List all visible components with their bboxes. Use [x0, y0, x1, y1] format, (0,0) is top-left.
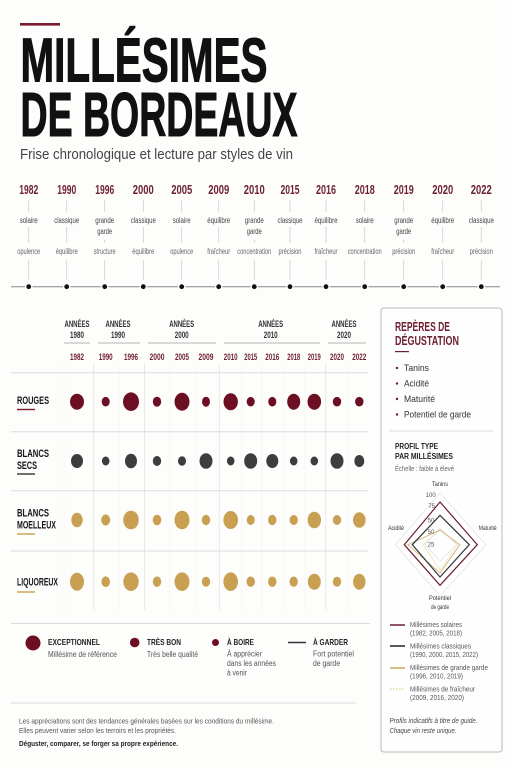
matrix year headers: 2022 [352, 352, 366, 362]
radar legend: Millésimes de fraîcheur [410, 684, 475, 694]
timeline year 2015: précision [278, 247, 302, 256]
legend [11, 624, 370, 678]
matrix year headers: 2018 [287, 352, 300, 362]
legend: à boire: À apprécier [227, 650, 262, 658]
timeline year 2010: garde [247, 227, 262, 236]
legend: très bon: Très belle qualité [147, 650, 198, 659]
timeline year 1990: 1990 [57, 183, 76, 197]
timeline year 1990: équilibre [56, 247, 78, 256]
row: rouges: ROUGES [17, 395, 49, 407]
radar legend: Millésimes solaires [410, 620, 462, 629]
timeline year 2019: garde [396, 227, 412, 236]
radar chart: 50 [428, 518, 435, 524]
timeline year 2016: équilibre [314, 216, 338, 225]
tasting criteria list [396, 363, 471, 420]
timeline year 2020: équilibre [431, 216, 455, 225]
radar legend: Millésimes de grande garde [410, 663, 488, 672]
row: blancs moelleux: MOELLEUX [17, 520, 56, 532]
timeline year 2010: concentration [237, 247, 271, 256]
tasting criteria list: Acidité [404, 378, 429, 390]
timeline year 1982 [17, 183, 41, 291]
timeline year 1990: classique [54, 216, 80, 225]
timeline year 2019: précision [392, 247, 415, 256]
timeline year 2019: grande [394, 216, 414, 225]
row: blancs secs: BLANCS [17, 448, 49, 460]
legend: à garder [288, 637, 354, 668]
row: liquoreux [17, 572, 365, 593]
decade headers: 2020 [337, 330, 351, 340]
matrix year headers: 2009 [198, 352, 214, 362]
matrix year headers: 1982 [70, 352, 84, 362]
tasting criteria list: Tanins [404, 363, 429, 374]
subtitle: Frise chronologique et lecture par styles de vin [20, 146, 293, 163]
panel heading [395, 319, 459, 352]
matrix year headers: 2016 [265, 352, 279, 362]
matrix year headers: 2020 [330, 352, 344, 362]
tasting criteria list: Potentiel de garde [404, 410, 471, 420]
title block: MILLÉSIMES [20, 26, 268, 96]
timeline year 2009: 2009 [208, 183, 229, 197]
radar heading: PROFIL TYPE [395, 442, 439, 451]
row: blancs moelleux [17, 508, 366, 535]
panel note: Profils indicatifs à titre de guide. [390, 716, 478, 725]
timeline year 1996: structure [94, 247, 116, 256]
footer note: Les appréciations sont des tendances générales basées sur les conditions du millésime. [19, 716, 274, 726]
legend: à garder: de garde [313, 659, 340, 668]
timeline [11, 183, 500, 291]
matrix year headers [70, 352, 366, 362]
decade headers: 2000 [175, 330, 189, 340]
timeline year 2018: solaire [356, 216, 374, 225]
timeline year 2000: équilibre [132, 247, 155, 256]
timeline year 1996: garde [97, 227, 113, 236]
legend: à garder: À GARDER [313, 637, 348, 647]
timeline year 1982: solaire [20, 216, 38, 225]
decade headers: ANNÉES [169, 319, 194, 329]
radar chart: 75 [428, 504, 436, 510]
radar chart: 50 [428, 530, 435, 536]
timeline year 1996: grande [95, 216, 115, 225]
decade headers: 1980 [70, 330, 84, 340]
panel heading: REPÈRES DE [395, 319, 450, 334]
row: rouges [17, 392, 363, 411]
timeline year 2005: solaire [173, 216, 191, 225]
timeline year 2015 [278, 183, 303, 291]
radar legend: (2009, 2016, 2020) [410, 693, 464, 702]
title block [20, 23, 298, 150]
radar chart: Potentiel [429, 596, 451, 602]
radar chart: Maturité [479, 526, 497, 532]
radar chart: Acidité [388, 526, 405, 532]
decade headers: ANNÉES [106, 319, 130, 329]
timeline year 2010: grande [245, 216, 264, 225]
radar legend: Millésimes classiques [410, 642, 471, 650]
decade headers: ANNÉES [258, 319, 283, 329]
timeline year 2016: fraîcheur [314, 247, 338, 256]
row: blancs secs [17, 448, 364, 475]
timeline year 2009: fraîcheur [207, 247, 230, 256]
radar heading [395, 442, 454, 473]
timeline year 2018 [348, 183, 382, 291]
radar chart: de garde [431, 605, 450, 611]
radar legend: (1982, 2005, 2018) [410, 628, 462, 638]
timeline year 2000: classique [131, 216, 156, 225]
legend: exceptionnel: EXCEPTIONNEL [48, 637, 100, 647]
radar chart: 100 [426, 493, 436, 499]
timeline year 2000 [131, 183, 156, 291]
timeline year 2005 [170, 183, 194, 291]
panel note [390, 716, 478, 735]
timeline year 2010: 2010 [244, 183, 265, 197]
timeline year 2020: 2020 [432, 183, 453, 197]
legend: très bon [130, 637, 198, 659]
matrix year headers: 2000 [150, 352, 164, 362]
matrix year headers: 2015 [244, 352, 257, 362]
row: blancs secs: SECS [17, 460, 37, 472]
legend: à garder: Fort potentiel [313, 650, 354, 658]
decade headers: ANNÉES [64, 319, 90, 329]
row: blancs moelleux: BLANCS [17, 508, 49, 520]
decade headers: 2010 [264, 330, 278, 340]
title block: DE BORDEAUX [20, 81, 298, 150]
timeline year 2016: 2016 [316, 183, 336, 197]
panel: repères de dégustation [381, 308, 502, 752]
panel note: Chaque vin reste unique. [390, 726, 456, 735]
matrix year headers: 2005 [175, 352, 189, 362]
radar legend: (1996, 2010, 2019) [410, 672, 463, 680]
timeline year 2022: précision [470, 247, 493, 256]
timeline year 1996: 1996 [95, 183, 114, 197]
radar chart: 25 [428, 542, 435, 548]
radar heading: PAR MILLÉSIMES [395, 452, 454, 461]
footer note: Elles peuvent varier selon les terroirs et les propriétés. [19, 726, 176, 735]
radar chart [388, 482, 497, 611]
radar legend: (1990, 2000, 2015, 2022) [410, 650, 478, 659]
timeline year 2018: concentration [348, 247, 382, 256]
timeline year 1996 [94, 183, 116, 291]
timeline year 2020 [431, 183, 455, 291]
timeline year 2018: 2018 [355, 183, 375, 197]
vintage matrix [11, 319, 368, 610]
tasting criteria list: Maturité [404, 394, 435, 405]
footer note [11, 703, 356, 748]
timeline year 2009 [207, 183, 231, 291]
legend: exceptionnel [26, 636, 117, 659]
matrix year headers: 1996 [124, 352, 138, 362]
timeline year 2020: fraîcheur [431, 247, 454, 256]
decade headers: 1990 [111, 330, 125, 340]
timeline year 2005: 2005 [171, 183, 192, 197]
legend: très bon: TRÈS BON [147, 637, 181, 647]
timeline year 1990 [54, 183, 80, 291]
timeline year 2016 [314, 183, 338, 291]
timeline year 1982: 1982 [19, 183, 38, 197]
timeline year 2000: 2000 [133, 183, 154, 197]
row: liquoreux: LIQUOREUX [17, 577, 58, 589]
timeline year 2015: 2015 [280, 183, 300, 197]
timeline year 2009: équilibre [207, 216, 231, 225]
timeline year 2019: 2019 [394, 183, 414, 197]
timeline year 1982: opulence [17, 247, 41, 256]
legend: à boire: À BOIRE [227, 637, 254, 647]
timeline year 2005: opulence [170, 247, 194, 256]
timeline year 2015: classique [278, 216, 303, 225]
legend: à boire: à venir [227, 668, 247, 678]
timeline year 2019 [392, 183, 415, 291]
matrix year headers: 1990 [99, 352, 113, 362]
timeline year 2022: 2022 [471, 183, 492, 197]
footer note: Déguster, comparer, se forger sa propre expérience. [19, 739, 178, 748]
radar chart: Tanins [432, 482, 448, 488]
legend: à boire [212, 637, 276, 678]
panel heading: DÉGUSTATION [395, 333, 459, 348]
decade headers [64, 319, 366, 343]
timeline year 2010 [237, 183, 271, 291]
timeline year 2022 [469, 183, 494, 291]
legend: à boire: dans les années [227, 659, 276, 668]
radar heading: Échelle : faible à élevé [395, 464, 454, 473]
matrix year headers: 2019 [308, 352, 321, 362]
timeline year 2022: classique [469, 216, 494, 225]
legend: exceptionnel: Millésime de référence [48, 650, 117, 659]
radar legend [390, 620, 488, 702]
matrix year headers: 2010 [224, 352, 238, 362]
decade headers: ANNÉES [332, 319, 356, 329]
